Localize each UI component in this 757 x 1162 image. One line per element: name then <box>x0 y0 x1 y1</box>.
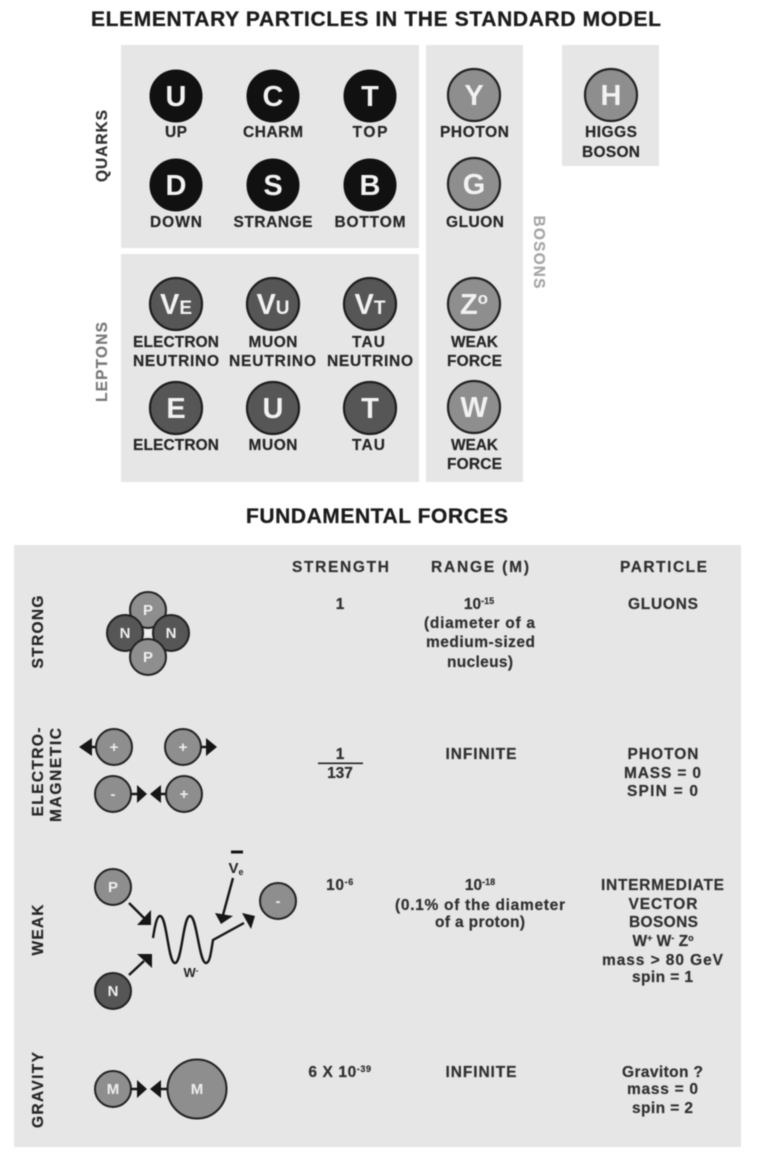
row values: gravity: -39 <box>357 1064 372 1074</box>
row values: weak: -6 <box>345 877 354 887</box>
row values: strong: GLUONS <box>628 596 698 613</box>
particle: gluon: G <box>463 169 485 201</box>
particle: bottom quark: B <box>360 170 380 202</box>
particle: tau neutrino <box>327 278 413 370</box>
row values: weak: 10 <box>465 877 482 894</box>
diagram: gravity attraction: M <box>107 1081 119 1098</box>
panel: Higgs boson: BOSON <box>582 144 640 161</box>
row values: weak: (0.1% of the diameter <box>395 897 565 914</box>
particle: up quark <box>150 70 202 141</box>
row values: electromagnetic <box>318 746 701 800</box>
particle: photon: Y <box>464 80 484 112</box>
diagram: electromagnetic repulsion and attraction: - <box>110 786 116 803</box>
diagram: weak force decay: P <box>108 879 118 896</box>
particle: up quark: U <box>166 81 186 113</box>
row label: strong: STRONG <box>30 596 47 668</box>
row values: strong: 1 <box>336 596 345 613</box>
particle: gluon <box>446 158 504 231</box>
row values: strong: nucleus) <box>447 654 513 671</box>
panel: bosons <box>426 45 523 482</box>
particle: W boson: WEAK <box>451 437 499 454</box>
particle: muon: U <box>263 393 283 425</box>
row label: electromagnetic: MAGNETIC <box>48 728 65 822</box>
diagram: electromagnetic repulsion and attraction: + <box>110 739 119 756</box>
diagram: electromagnetic repulsion and attraction: + <box>180 786 189 803</box>
particle: photon <box>440 69 509 141</box>
row values: strong <box>336 596 698 671</box>
label: leptons: LEPTONS <box>94 322 111 402</box>
row values: weak: VECTOR <box>628 896 698 913</box>
panel: leptons <box>121 254 419 482</box>
particle: electron <box>133 382 219 454</box>
row label: weak: WEAK <box>30 904 47 956</box>
particle: Z boson <box>447 278 502 370</box>
diagram: weak force decay <box>95 850 296 1009</box>
particle: W boson: FORCE <box>447 456 502 473</box>
particle: Z boson: WEAK <box>451 334 499 351</box>
row values: weak: of a proton) <box>435 914 525 931</box>
column headers <box>292 559 707 576</box>
row values: weak: -18 <box>482 877 495 887</box>
diagram: weak force decay: W <box>184 965 196 980</box>
panel: fundamental forces <box>14 545 741 1147</box>
panel: Higgs boson: HIGGS <box>585 124 637 141</box>
particle: electron: E <box>166 393 186 425</box>
row values: electromagnetic: 1 <box>336 746 345 763</box>
particle: top quark: TOP <box>352 124 388 141</box>
title: fundamental forces: FUNDAMENTAL FORCES <box>246 505 508 528</box>
row values: weak: 10 <box>326 877 345 894</box>
row values: weak: - <box>671 933 674 943</box>
particle: bottom quark: BOTTOM <box>334 214 406 231</box>
row values: weak: spin = 1 <box>632 969 693 986</box>
row values: weak: + <box>647 933 652 943</box>
row values: gravity: 6 X 10 <box>308 1064 357 1081</box>
diagram: weak force decay: - <box>276 893 280 910</box>
particle: strange quark: S <box>263 170 283 202</box>
row values: weak: W <box>652 933 672 950</box>
panel: Higgs boson <box>562 45 659 166</box>
row values: electromagnetic: 137 <box>327 765 353 782</box>
particle: top quark <box>344 70 396 141</box>
particle: W boson: W <box>460 392 488 424</box>
diagram: weak force decay: e <box>238 867 244 877</box>
particle: electron neutrino: ELECTRON <box>133 334 219 351</box>
row values: strong: medium-sized <box>426 634 535 651</box>
particle: up quark: UP <box>165 124 187 141</box>
particle: down quark: DOWN <box>150 214 202 231</box>
column headers: PARTICLE <box>620 559 707 576</box>
diagram: strong force nucleus: P <box>143 649 153 666</box>
row values: gravity: Graviton ? <box>622 1064 703 1081</box>
row values: weak: mass > 80 GeV <box>602 952 724 969</box>
row values: weak: INTERMEDIATE <box>601 877 724 894</box>
particle: top quark: T <box>361 81 379 113</box>
particle: muon neutrino: MUON <box>248 334 298 351</box>
diagram: strong force nucleus: N <box>166 625 176 642</box>
diagram: strong force nucleus: N <box>120 625 130 642</box>
particle: tau neutrino: TAU <box>352 334 385 351</box>
particle: electron: ELECTRON <box>133 437 219 454</box>
row values: gravity: spin = 2 <box>632 1100 693 1117</box>
label: quarks: QUARKS <box>94 110 111 182</box>
diagram: weak force decay: N <box>108 983 118 1000</box>
panel: quarks <box>121 45 419 248</box>
diagram: electromagnetic repulsion and attraction: + <box>179 739 188 756</box>
particle: strange quark: STRANGE <box>234 214 312 231</box>
particle: tau neutrino: VT <box>355 289 386 321</box>
particle: photon: PHOTON <box>440 124 509 141</box>
particle: charm quark: CHARM <box>243 124 303 141</box>
label: bosons: BOSONS <box>530 216 547 288</box>
column headers: STRENGTH <box>292 559 389 576</box>
particle: down quark: D <box>166 170 186 202</box>
particle: down quark <box>150 159 202 231</box>
diagram: gravity attraction: M <box>191 1081 203 1098</box>
row values: gravity <box>308 1064 703 1117</box>
row values: electromagnetic: INFINITE <box>446 746 516 763</box>
column headers: RANGE (M) <box>431 559 529 576</box>
particle: charm quark: C <box>263 81 284 113</box>
row label: electromagnetic <box>30 728 65 822</box>
row values: weak: BOSONS <box>629 914 698 931</box>
diagram: electromagnetic repulsion and attraction <box>79 729 217 812</box>
particle: electron neutrino: NEUTRINO <box>133 353 219 370</box>
row values: electromagnetic: PHOTON <box>628 746 698 763</box>
row values: weak: W <box>632 933 647 950</box>
particle: muon: MUON <box>248 437 298 454</box>
row values: strong: -15 <box>481 596 494 606</box>
particle: W boson <box>447 381 502 473</box>
particle: electron neutrino <box>133 278 219 370</box>
title: elementary particles: ELEMENTARY PARTICLES IN THE STANDARD MODEL <box>91 8 661 31</box>
row label: electromagnetic: ELECTRO- <box>30 728 47 816</box>
row label: gravity: GRAVITY <box>30 1051 47 1128</box>
particle: muon neutrino <box>229 278 316 370</box>
particle: Z boson: Z <box>460 289 478 321</box>
row values: strong: (diameter of a <box>424 615 535 632</box>
row values: gravity: INFINITE <box>446 1064 516 1081</box>
particle: gluon: GLUON <box>446 214 504 231</box>
row values: gravity: mass = 0 <box>627 1081 698 1098</box>
particle: tau: TAU <box>352 437 385 454</box>
diagram: weak force decay: - <box>196 966 199 975</box>
particle: muon <box>247 382 299 454</box>
row values: weak <box>326 877 724 986</box>
particle: tau neutrino: NEUTRINO <box>327 353 413 370</box>
row values: electromagnetic: MASS = 0 <box>624 765 701 782</box>
diagram: weak force decay: V <box>228 860 238 877</box>
particle: tau <box>344 382 396 454</box>
particle: tau: T <box>361 393 379 425</box>
particle: strange quark <box>234 159 312 231</box>
diagram: gravity attraction <box>95 1060 226 1118</box>
particle: bottom quark <box>334 159 406 231</box>
row values: weak: Z <box>674 933 689 950</box>
row values: weak: o <box>688 933 694 943</box>
panel: Higgs boson: H <box>601 80 621 112</box>
particle: charm quark <box>243 70 303 141</box>
particle: muon neutrino: VU <box>256 289 290 321</box>
row values: electromagnetic: SPIN = 0 <box>627 783 698 800</box>
particle: muon neutrino: NEUTRINO <box>229 353 316 370</box>
particle: Z boson: o <box>478 289 488 308</box>
row values: strong: 10 <box>464 596 481 613</box>
particle: electron neutrino: VE <box>160 289 192 321</box>
diagram: strong force nucleus: P <box>143 602 153 619</box>
particle: Z boson: FORCE <box>447 353 502 370</box>
diagram: strong force nucleus <box>107 592 189 675</box>
